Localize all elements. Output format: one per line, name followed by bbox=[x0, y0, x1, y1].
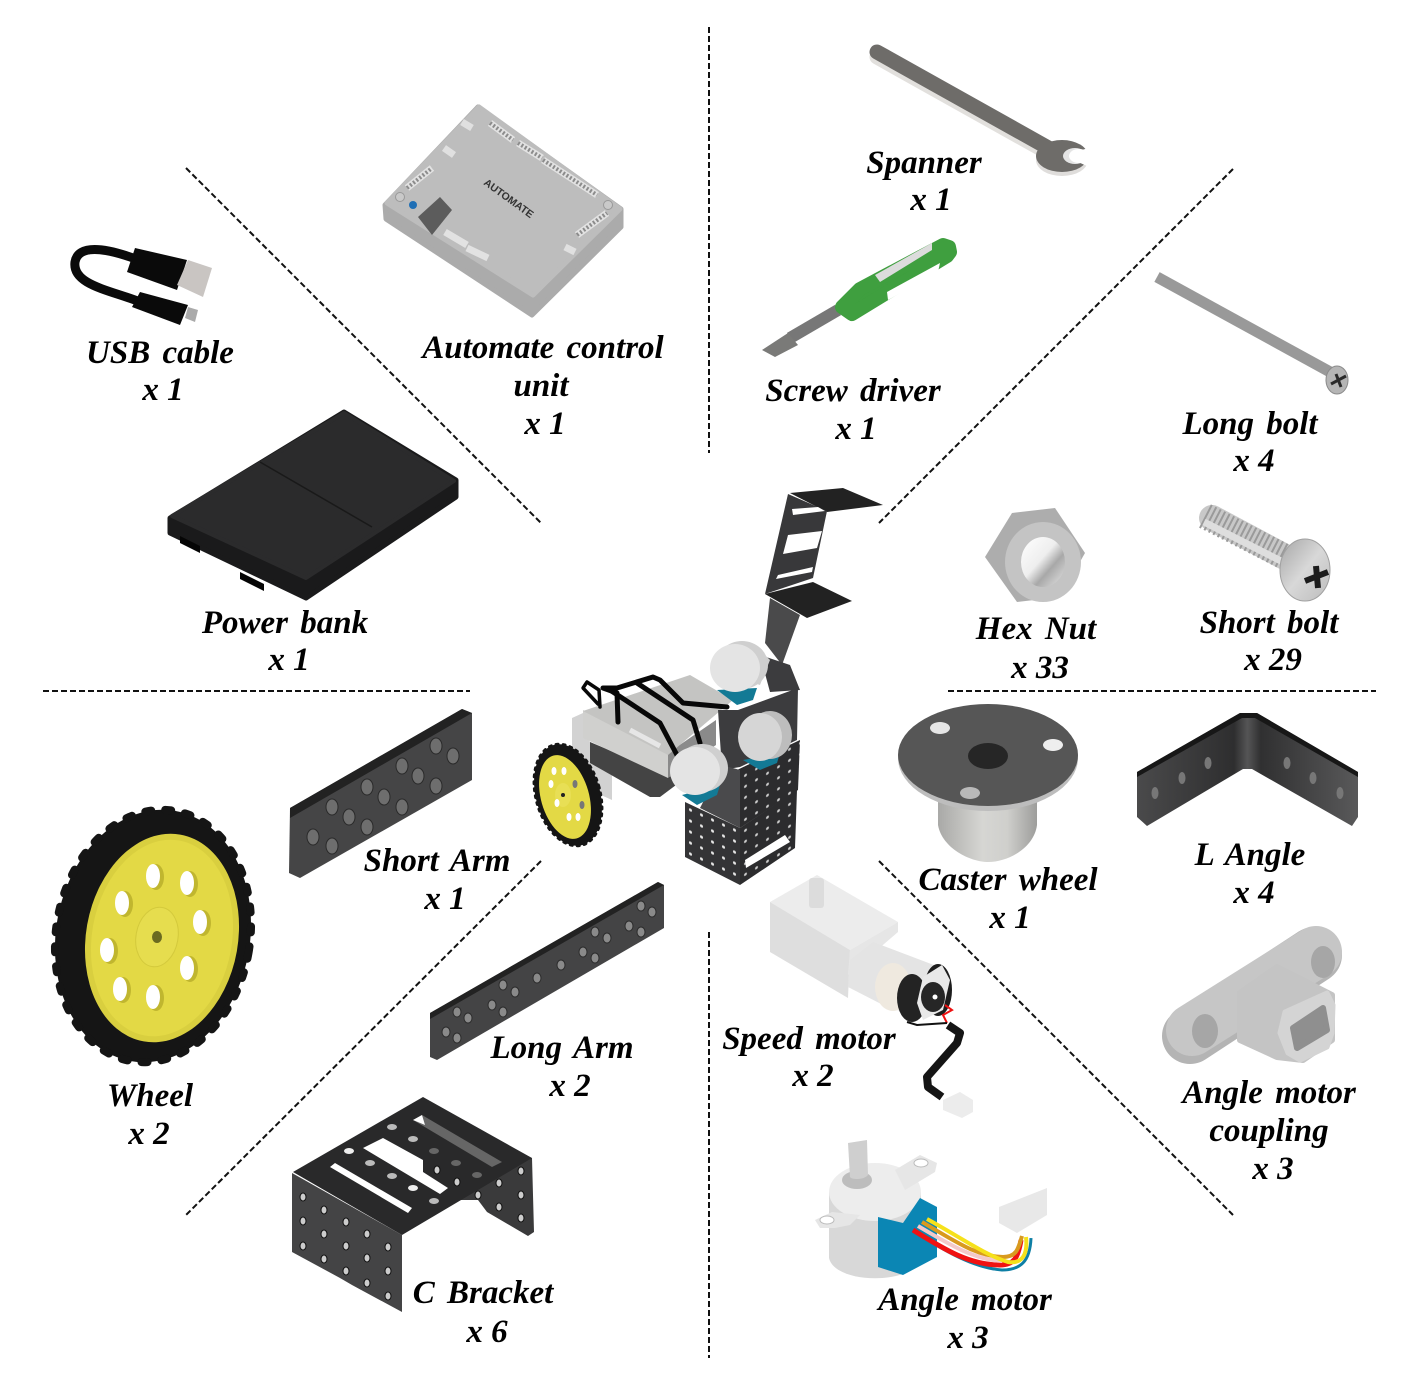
icon: USB cable bbox=[75, 248, 212, 325]
robot wheel bbox=[523, 736, 613, 854]
icon: Long bolt bbox=[1157, 277, 1348, 394]
motors bbox=[670, 641, 792, 805]
label: Spanner: x 1 bbox=[909, 182, 952, 218]
label: USB cable: USB cable bbox=[86, 335, 234, 371]
label: Long bolt: x 4 bbox=[1232, 443, 1275, 479]
icon: Short Arm bbox=[289, 709, 472, 878]
label: Angle motor coupling: coupling bbox=[1209, 1113, 1329, 1149]
icon: Automate control unit bbox=[385, 107, 621, 315]
icon: Angle motor coupling bbox=[1190, 946, 1335, 1060]
label: Long Arm: Long Arm bbox=[490, 1030, 634, 1066]
label: Short bolt: x 29 bbox=[1243, 642, 1302, 678]
label: Speed motor: Speed motor bbox=[722, 1021, 896, 1057]
label: L Angle: x 4 bbox=[1232, 875, 1275, 911]
icon: Long Arm bbox=[430, 882, 664, 1060]
label: USB cable: x 1 bbox=[141, 372, 184, 408]
wires bbox=[583, 677, 727, 757]
icon: Caster wheel bbox=[898, 704, 1078, 862]
label: L Angle: L Angle bbox=[1195, 837, 1305, 873]
label: C Bracket: C Bracket bbox=[413, 1275, 553, 1311]
label: Wheel: x 2 bbox=[127, 1116, 170, 1152]
label: Screw driver: x 1 bbox=[834, 411, 877, 447]
label: Speed motor: x 2 bbox=[791, 1058, 834, 1094]
icon: Hex Nut bbox=[985, 508, 1085, 602]
label: Power bank: x 1 bbox=[267, 642, 310, 678]
label: Power bank: Power bank bbox=[202, 605, 368, 641]
label: Hex Nut: Hex Nut bbox=[976, 611, 1096, 647]
icon: Screw driver bbox=[762, 243, 950, 357]
label: Automate control unit: unit bbox=[513, 368, 569, 404]
control box bbox=[572, 675, 733, 800]
label: Long bolt: Long bolt bbox=[1182, 406, 1318, 442]
icon: Automate control unit: AUTOMATE bbox=[481, 177, 536, 221]
icon: Speed motor bbox=[770, 875, 973, 1118]
icon: L Angle bbox=[1137, 713, 1358, 826]
label: Automate control unit: x 1 bbox=[523, 406, 566, 442]
label: Hex Nut: x 33 bbox=[1010, 650, 1069, 686]
icon: Spanner bbox=[877, 52, 1096, 176]
label: Short Arm: Short Arm bbox=[364, 843, 510, 879]
tower cube bbox=[685, 688, 800, 885]
illustration: assembled robot bbox=[523, 488, 883, 885]
label: Screw driver: Screw driver bbox=[765, 373, 941, 409]
label: Caster wheel: Caster wheel bbox=[918, 862, 1098, 898]
label: Short Arm: x 1 bbox=[423, 881, 466, 917]
icon: Wheel bbox=[35, 794, 271, 1078]
icon: Short bolt bbox=[1204, 516, 1330, 601]
icon: Power bank bbox=[170, 412, 456, 598]
label: Angle motor coupling: x 3 bbox=[1251, 1151, 1294, 1187]
label: Long Arm: x 2 bbox=[548, 1068, 591, 1104]
label: Short bolt: Short bolt bbox=[1200, 605, 1338, 641]
label: C Bracket: x 6 bbox=[465, 1314, 508, 1350]
label: Caster wheel: x 1 bbox=[988, 900, 1031, 936]
label: Angle motor coupling: Angle motor bbox=[1182, 1075, 1356, 1111]
label: Angle motor: Angle motor bbox=[878, 1282, 1052, 1318]
label: Angle motor: x 3 bbox=[946, 1320, 989, 1356]
icon: Angle motor bbox=[815, 1140, 1047, 1278]
label: Spanner: Spanner bbox=[866, 145, 982, 181]
tower bracket bbox=[760, 488, 883, 692]
label: Automate control unit: Automate control bbox=[422, 330, 664, 366]
label: Wheel: Wheel bbox=[107, 1078, 193, 1114]
icon: C Bracket bbox=[292, 1097, 534, 1312]
